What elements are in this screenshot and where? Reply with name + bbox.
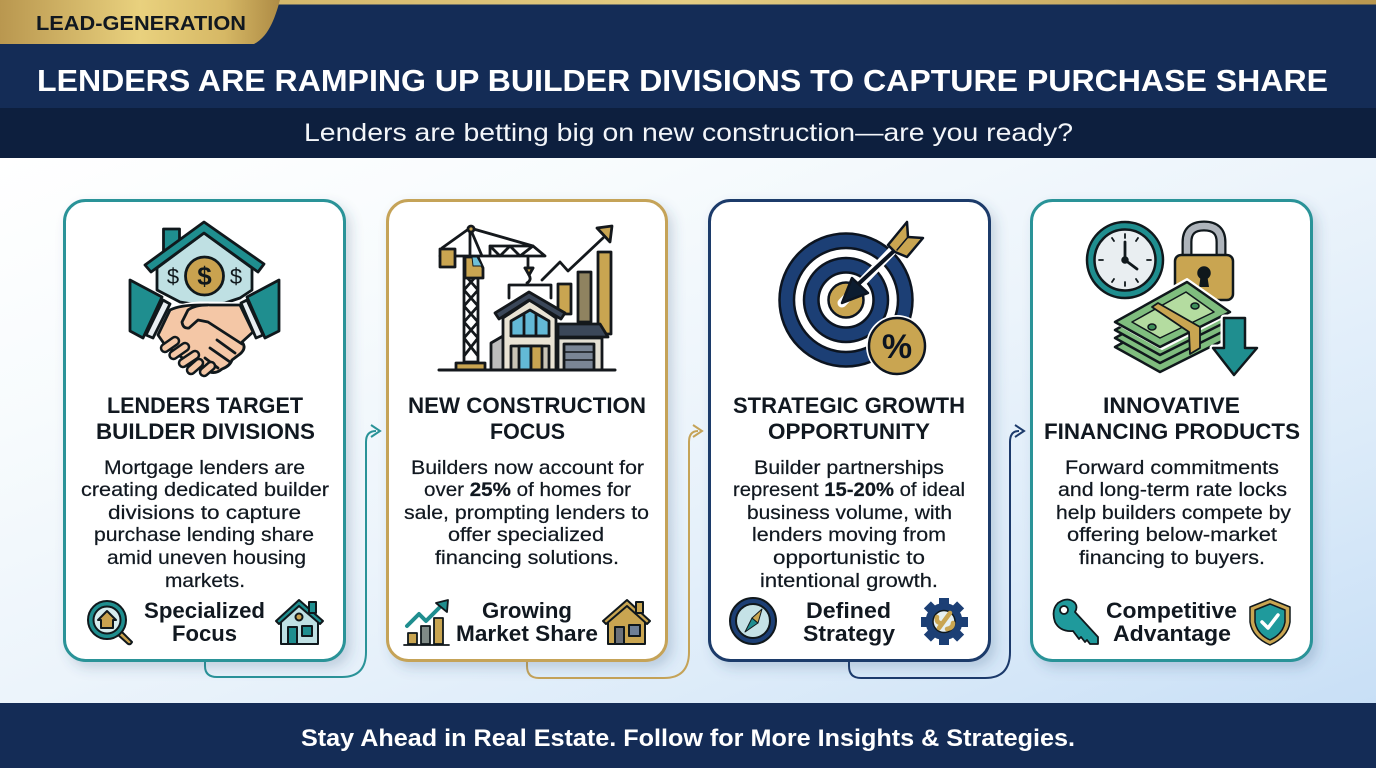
body text — [404, 457, 649, 569]
label: Growing — [482, 598, 572, 623]
icon: teal house — [276, 600, 323, 644]
body text — [1056, 457, 1291, 569]
icon: target, arrow and percent badge: % — [882, 328, 912, 366]
icon: house and handshake: $ — [167, 264, 179, 289]
icon: crane, house and growth bars — [439, 226, 615, 370]
body text: Builder partnerships — [754, 457, 944, 479]
icon: gold house — [603, 600, 650, 644]
icon: magnifier with house — [88, 601, 132, 644]
heading: BUILDER DIVISIONS — [96, 419, 315, 444]
body text: help builders compete by — [1056, 502, 1291, 524]
header band — [0, 0, 1376, 158]
panel: lenders target builder divisions — [64, 200, 344, 660]
heading: LENDERS TARGET — [107, 393, 303, 418]
label — [1106, 598, 1237, 646]
label: Specialized — [144, 598, 265, 623]
label: Competitive — [1106, 598, 1237, 623]
label: Market Share — [456, 621, 598, 646]
icon: shield with check — [1250, 599, 1290, 645]
body text: creating dedicated builder — [81, 479, 330, 501]
icon: clock, lock, cash and down arrow — [1087, 222, 1257, 375]
body text: markets. — [165, 570, 245, 592]
body text: business volume, with — [747, 502, 952, 524]
category tag: lead-generation: LEAD-GENERATION — [36, 12, 246, 35]
icon: key — [1054, 600, 1098, 644]
icon: growth chart — [404, 600, 449, 645]
body text: lenders moving from — [752, 524, 946, 546]
icon: compass — [730, 598, 776, 644]
connector arrow: card 1 to card 2 — [205, 425, 380, 677]
body text: offering below-market — [1067, 524, 1278, 546]
heading: INNOVATIVE — [1103, 393, 1240, 418]
subtitle: Lenders are betting big on new construction—are you ready? — [304, 119, 1073, 147]
heading: OPPORTUNITY — [768, 419, 930, 444]
body text: amid uneven housing — [107, 547, 306, 569]
body text: and long-term rate locks — [1058, 479, 1287, 501]
panel: new construction focus — [388, 200, 666, 660]
body text: purchase lending share — [94, 524, 314, 546]
body text: Builders now account for — [411, 457, 645, 479]
connector arrow: card 3 to card 4 — [849, 425, 1024, 678]
body text: Forward commitments — [1065, 457, 1279, 479]
label — [456, 598, 598, 646]
body text: intentional growth. — [760, 570, 938, 592]
panel: strategic growth opportunity — [710, 200, 990, 660]
body text: sale, prompting lenders to — [404, 502, 649, 524]
label: Focus — [172, 621, 237, 646]
body text: opportunistic to — [773, 547, 925, 569]
heading: FOCUS — [490, 419, 565, 444]
footer text: Stay Ahead in Real Estate. Follow for More Insights & Strategies. — [301, 725, 1075, 752]
body text — [81, 457, 330, 592]
heading — [96, 393, 315, 444]
icon: gear and wrench — [921, 598, 968, 645]
panel: innovative financing products — [1032, 200, 1312, 660]
body text — [733, 457, 965, 592]
page background — [0, 158, 1376, 704]
label — [803, 598, 895, 646]
body text: offer specialized — [448, 524, 604, 546]
icon: target, arrow and percent badge — [780, 222, 928, 377]
footer band — [0, 703, 1376, 768]
body text: represent 15-20% of ideal — [733, 479, 965, 501]
label: Strategy — [803, 621, 895, 646]
category tag: lead-generation — [0, 0, 280, 44]
icon: house and handshake — [130, 222, 279, 373]
icon: house and handshake: $ — [230, 264, 242, 289]
label: Defined — [806, 598, 891, 623]
heading: FINANCING PRODUCTS — [1044, 419, 1300, 444]
heading: NEW CONSTRUCTION — [408, 393, 646, 418]
heading: STRATEGIC GROWTH — [733, 393, 965, 418]
body text: financing solutions. — [435, 547, 619, 569]
heading — [1044, 393, 1300, 444]
heading — [408, 393, 646, 444]
body text: Mortgage lenders are — [104, 457, 305, 479]
label — [144, 598, 265, 646]
title: LENDERS ARE RAMPING UP BUILDER DIVISIONS TO CAPTURE PURCHASE SHARE — [37, 64, 1328, 98]
heading — [733, 393, 965, 444]
body text: divisions to capture — [108, 502, 301, 524]
label: Advantage — [1113, 621, 1231, 646]
connector arrow: card 2 to card 3 — [527, 425, 702, 678]
body text: over 25% of homes for — [424, 479, 632, 501]
body text: financing to buyers. — [1079, 547, 1265, 569]
icon: house and handshake: $ — [197, 261, 212, 291]
